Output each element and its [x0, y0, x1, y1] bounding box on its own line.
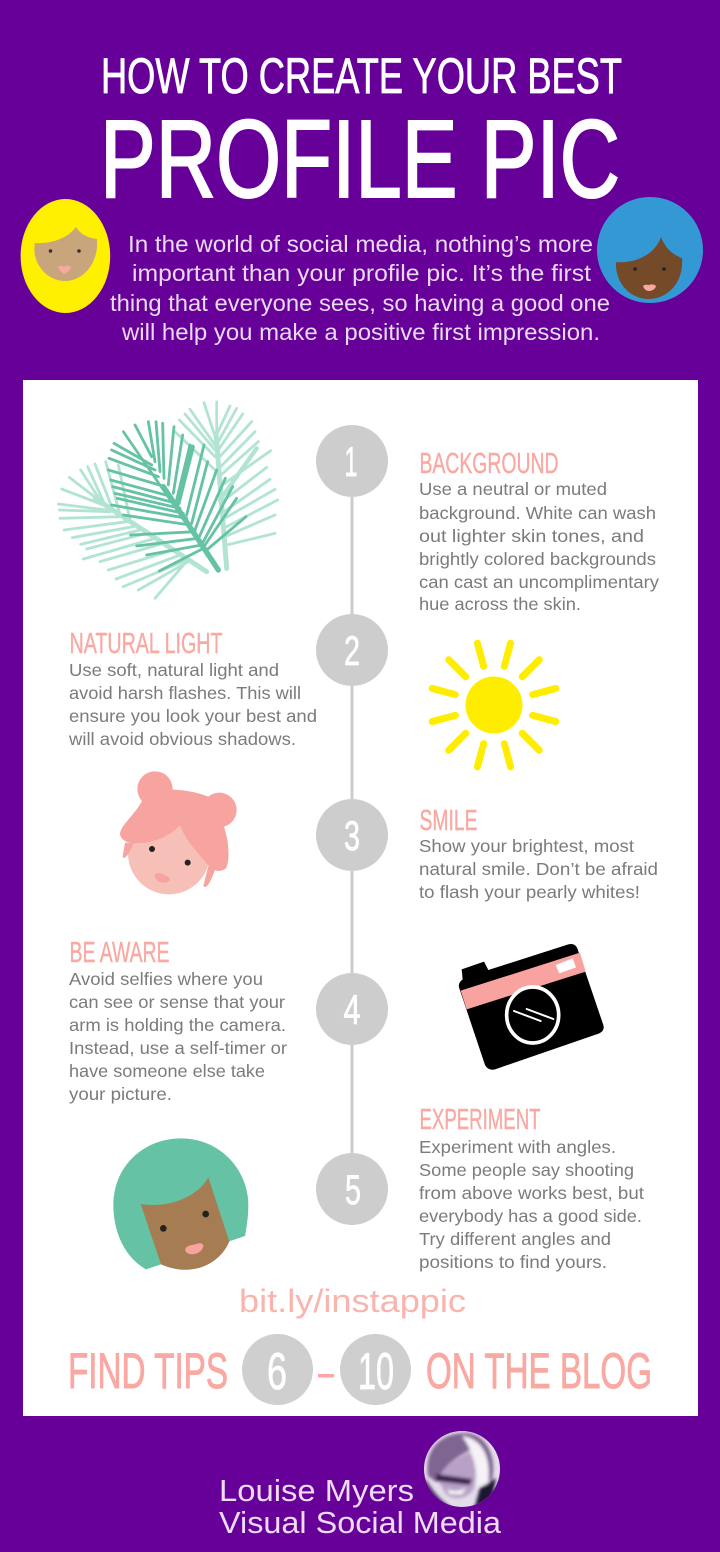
text: natural light tip: [68, 660, 317, 749]
timeline: 5: [345, 1166, 361, 1213]
heading: natural light: NATURAL LIGHT: [70, 628, 223, 660]
icon: sun: [432, 643, 556, 767]
icon: camera: [459, 944, 604, 1070]
text: smile tip: to flash your pearly whites!: [419, 882, 640, 902]
heading: background: BACKGROUND: [420, 448, 558, 480]
text: be aware tip: [69, 969, 287, 1104]
text: background tip: Use a neutral or muted: [419, 479, 607, 499]
text: experiment tip: everybody has a good side.: [419, 1206, 642, 1226]
call to action: 6: [267, 1343, 287, 1401]
text: smile tip: [419, 836, 658, 902]
text: experiment tip: from above works best, but: [419, 1183, 644, 1203]
timeline: [316, 425, 388, 1225]
text: smile tip: Show your brightest, most: [419, 836, 634, 856]
text: be aware tip: can see or sense that your: [69, 992, 285, 1012]
text: smile tip: natural smile. Don’t be afraid: [419, 859, 658, 879]
text: experiment tip: positions to find yours.: [419, 1252, 607, 1272]
heading: experiment: EXPERIMENT: [420, 1104, 541, 1136]
icon: pink haired face: [120, 771, 237, 894]
icon: green haired face: [113, 1138, 248, 1270]
text: background tip: can cast an uncomplimentary: [419, 572, 659, 592]
panel: tips: [23, 380, 698, 1416]
text: be aware tip: your picture.: [69, 1084, 172, 1104]
text: background tip: [419, 479, 659, 614]
text: experiment tip: Experiment with angles.: [419, 1137, 616, 1157]
author photo: [424, 1431, 500, 1510]
text: experiment tip: [419, 1137, 644, 1272]
text: be aware tip: Instead, use a self-timer or: [69, 1038, 287, 1058]
heading: smile: SMILE: [420, 805, 478, 837]
text: background tip: out lighter skin tones, and: [419, 526, 644, 546]
text: natural light tip: avoid harsh flashes. This will: [69, 683, 301, 703]
text: experiment tip: Some people say shooting: [419, 1160, 634, 1180]
intro text: In the world of social media, nothing’s more: [128, 231, 593, 257]
author credit: [219, 1473, 502, 1540]
call to action: [68, 1334, 652, 1405]
call to action: 10: [358, 1343, 394, 1401]
author credit: Louise Myers: [219, 1473, 414, 1508]
icon: palm leaves: [58, 402, 278, 598]
icon: yellow haired avatar: [21, 199, 110, 313]
text: be aware tip: Avoid selfies where you: [69, 969, 263, 989]
text: natural light tip: will avoid obvious shadows.: [68, 729, 296, 749]
intro text: important than your profile pic. It’s the first: [132, 260, 592, 286]
text: natural light tip: ensure you look your best and: [69, 706, 317, 726]
text: be aware tip: have someone else take: [69, 1061, 265, 1081]
heading: be aware: BE AWARE: [70, 937, 170, 969]
title: [100, 48, 622, 221]
timeline: 3: [344, 812, 360, 859]
intro text: will help you make a positive first impression.: [121, 319, 600, 345]
timeline: 1: [344, 438, 358, 485]
intro text: thing that everyone sees, so having a good one: [110, 290, 610, 316]
text: background tip: background. White can wash: [419, 503, 656, 523]
text: be aware tip: arm is holding the camera.: [69, 1015, 286, 1035]
timeline: 2: [344, 627, 360, 674]
icon: blue haired avatar: [597, 197, 703, 303]
author credit: Visual Social Media: [219, 1505, 502, 1540]
text: background tip: brightly colored backgrounds: [419, 549, 656, 569]
text: background tip: hue across the skin.: [419, 594, 581, 614]
text: natural light tip: Use soft, natural light and: [69, 660, 279, 680]
intro text: [110, 231, 610, 345]
text: experiment tip: Try different angles and: [419, 1229, 611, 1249]
link: bit.ly: bit.ly/instappic: [239, 1283, 466, 1319]
timeline: 4: [344, 986, 360, 1033]
call to action: FIND TIPS: [68, 1343, 228, 1399]
